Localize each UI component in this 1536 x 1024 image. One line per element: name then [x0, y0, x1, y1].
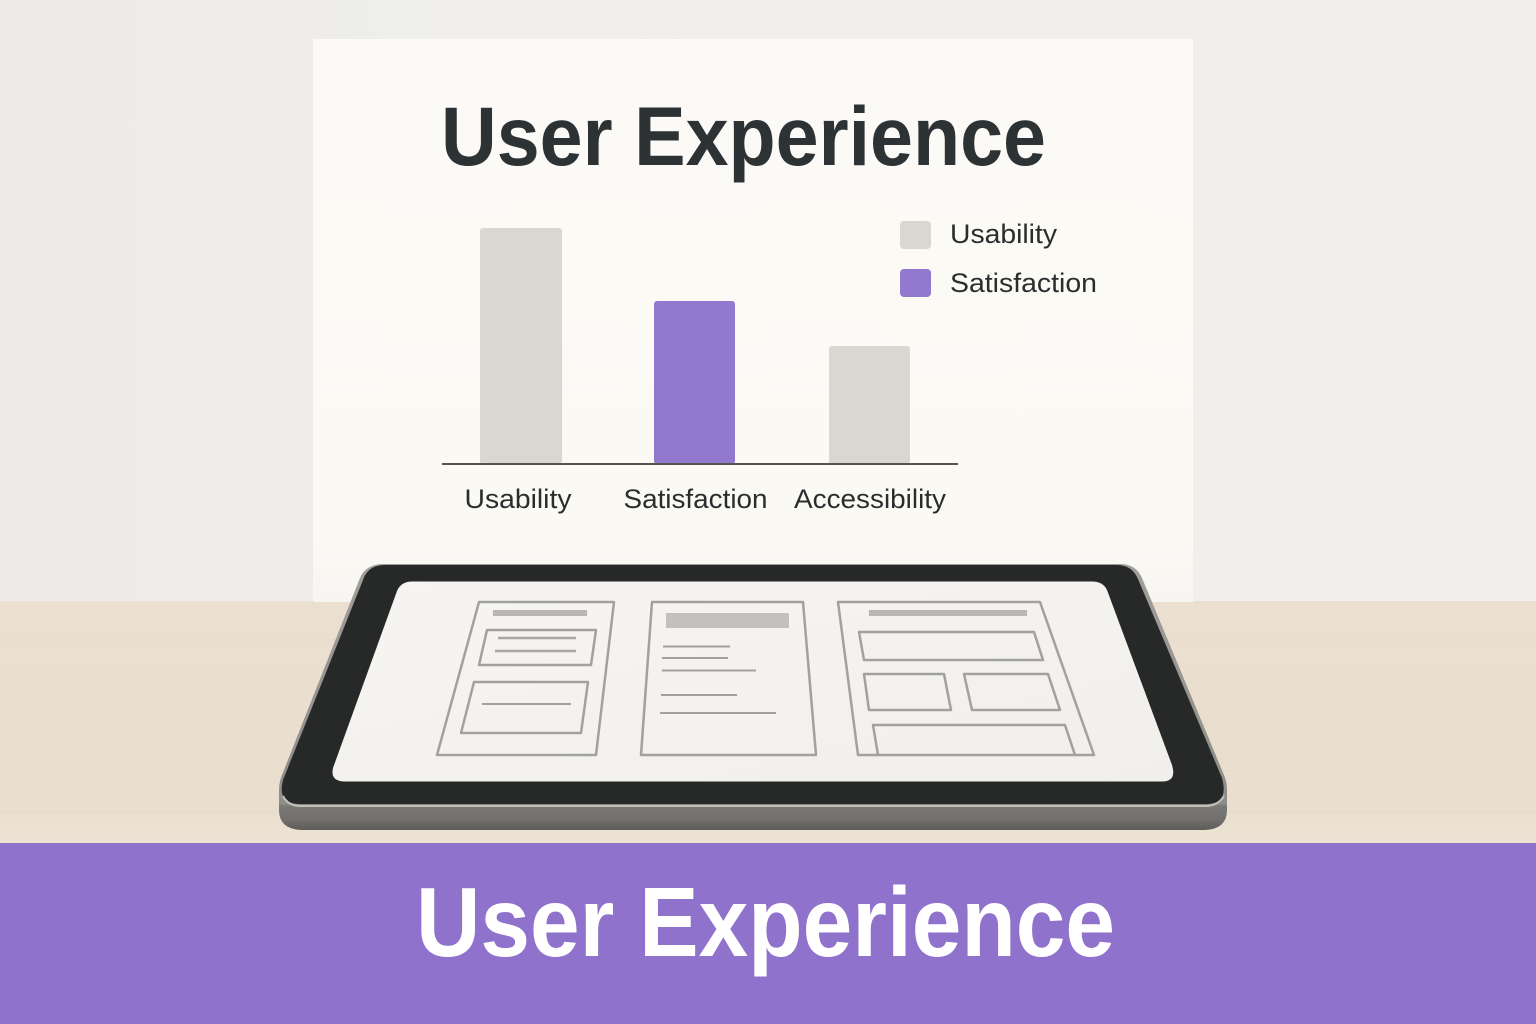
tablet [279, 564, 1227, 830]
footer band [0, 843, 1536, 1024]
tablet metal edge [279, 564, 1227, 830]
legend: Usability [950, 219, 1058, 249]
wall background [0, 0, 1536, 602]
legend: Satisfaction [950, 268, 1097, 298]
desk surface [0, 601, 1536, 844]
axis label: accessibility: Accessibility [794, 484, 947, 514]
bar chart [442, 228, 958, 514]
poster board [313, 39, 1193, 602]
wireframe right [838, 602, 1094, 755]
legend [900, 219, 1097, 298]
footer title: User Experience [416, 867, 1115, 977]
bar: satisfaction [654, 301, 735, 464]
tablet screen [332, 582, 1173, 782]
wireframe middle [641, 602, 816, 755]
axis label: usability: Usability [464, 484, 572, 514]
bar: usability [480, 228, 562, 464]
axis label: satisfaction: Satisfaction [624, 484, 768, 514]
bar: accessibility [829, 346, 910, 464]
tablet bezel [282, 565, 1224, 804]
tablet highlight [283, 796, 1224, 806]
wireframe left [437, 602, 614, 755]
poster title: User Experience [441, 91, 1046, 184]
